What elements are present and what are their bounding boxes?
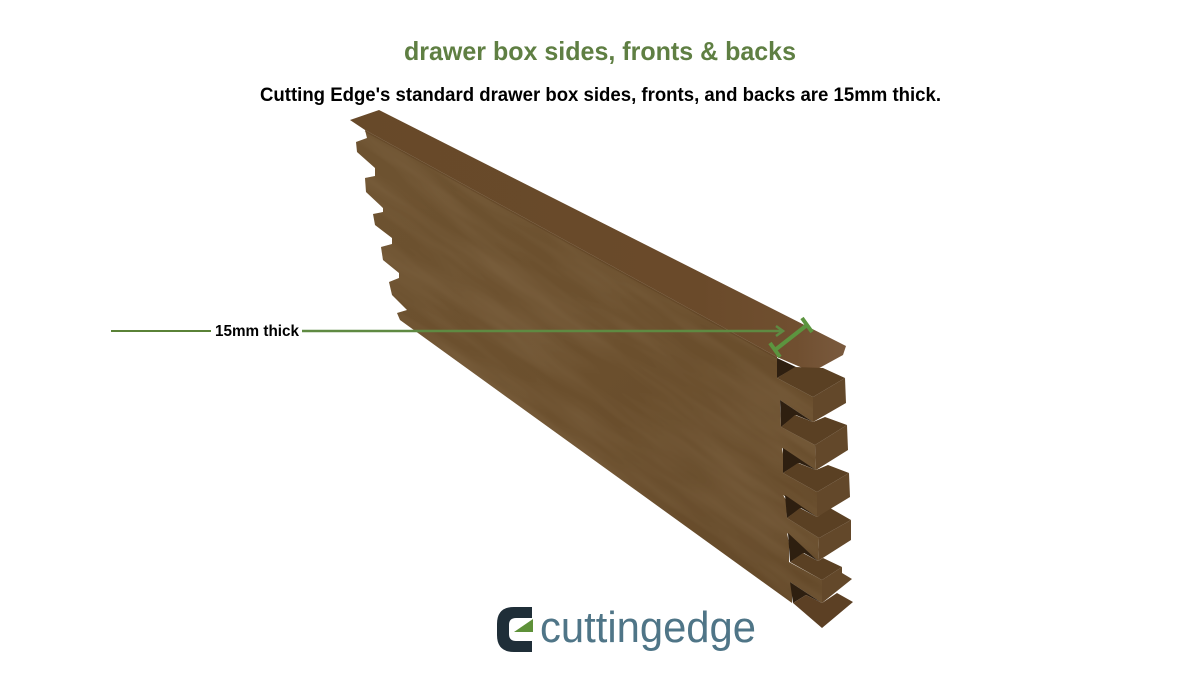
infographic canvas: [111, 41, 940, 652]
board face with dovetail fingers: [356, 130, 822, 603]
callout label: 15mm thick: [215, 323, 299, 340]
finger joints: top faces: [777, 367, 851, 580]
wooden drawer board photo illustration: [350, 110, 853, 628]
finger joints: dark slots: [777, 358, 822, 603]
logo: [497, 603, 756, 652]
logo mark: [497, 607, 533, 652]
callout arrow: [302, 326, 783, 336]
callout leader line left: [111, 330, 211, 332]
bottom finger: [793, 593, 853, 628]
title: drawer box sides, fronts & backs: [404, 36, 796, 66]
top edge strip: [350, 110, 846, 372]
subtitle: Cutting Edge's standard drawer box sides, fronts, and backs are 15mm thick.: [260, 85, 941, 106]
finger joints: end faces: [813, 378, 852, 603]
icon: thickness bracket: [770, 318, 812, 357]
logo wordmark: cuttingedge: [540, 603, 756, 652]
